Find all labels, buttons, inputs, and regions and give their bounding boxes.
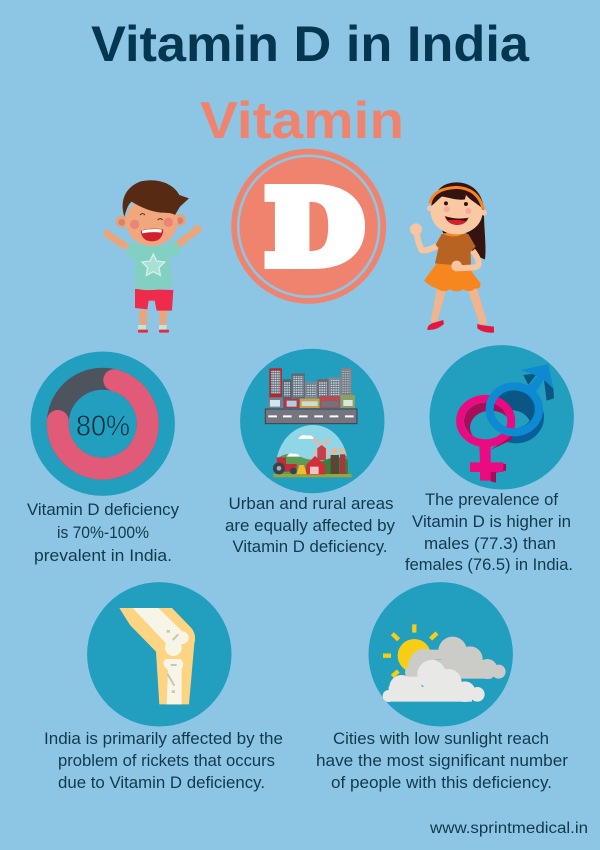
- icon circle: [240, 349, 384, 493]
- text block: [27, 501, 180, 565]
- male symbol: [490, 364, 553, 432]
- icon circle: [368, 582, 513, 726]
- website credit: www.sprintmedical.in: [429, 820, 588, 837]
- text block: The prevalence of: [425, 491, 558, 509]
- icon: letter D badge: D: [266, 169, 363, 287]
- icon: city: [265, 368, 357, 424]
- text block: males (77.3) than: [424, 535, 556, 553]
- panel: rickets: [44, 582, 283, 792]
- illustration: boy: [103, 180, 202, 333]
- icon: letter D badge: [231, 149, 386, 304]
- icon circle: [430, 345, 574, 489]
- text block: problem of rickets that occurs: [58, 752, 275, 770]
- text block: have the most significant number: [316, 752, 569, 770]
- panel: gender prevalence: [405, 345, 574, 574]
- male depth: [488, 391, 544, 443]
- donut chart: [58, 379, 148, 469]
- panel: prevalence donut: [27, 352, 180, 565]
- icon: farm: [273, 425, 352, 477]
- text block: are equally affected by: [225, 517, 396, 535]
- text block: Vitamin D deficiency: [27, 501, 180, 519]
- female symbol: [460, 399, 515, 483]
- panel: low sunlight: [316, 582, 569, 792]
- text block: females (76.5) in India.: [405, 556, 573, 574]
- text block: [44, 730, 283, 792]
- donut value: 80%: [76, 410, 130, 442]
- icon: knee joint: [119, 608, 195, 704]
- text block: is 70%-100%: [57, 524, 149, 542]
- text block: of people with this deficiency.: [331, 774, 552, 792]
- illustration: girl: [410, 182, 494, 333]
- icon circle: [87, 582, 232, 726]
- text block: India is primarily affected by the: [44, 730, 283, 748]
- text block: Vitamin D deficiency.: [232, 538, 388, 556]
- heading: Vitamin: Vitamin: [200, 92, 404, 150]
- text block: [225, 495, 396, 556]
- text block: [316, 730, 569, 792]
- text block: [405, 491, 573, 574]
- icon: sun and clouds: [383, 624, 506, 702]
- text block: Cities with low sunlight reach: [333, 730, 549, 748]
- panel: urban and rural: [225, 349, 396, 556]
- text block: Urban and rural areas: [228, 495, 394, 513]
- text block: Vitamin D is higher in: [412, 513, 571, 531]
- icon: gender symbols: [460, 364, 554, 483]
- icon circle: [30, 352, 175, 496]
- text block: due to Vitamin D deficiency.: [58, 774, 265, 792]
- title: Vitamin D in India: [91, 16, 530, 72]
- text block: prevalent in India.: [34, 547, 172, 565]
